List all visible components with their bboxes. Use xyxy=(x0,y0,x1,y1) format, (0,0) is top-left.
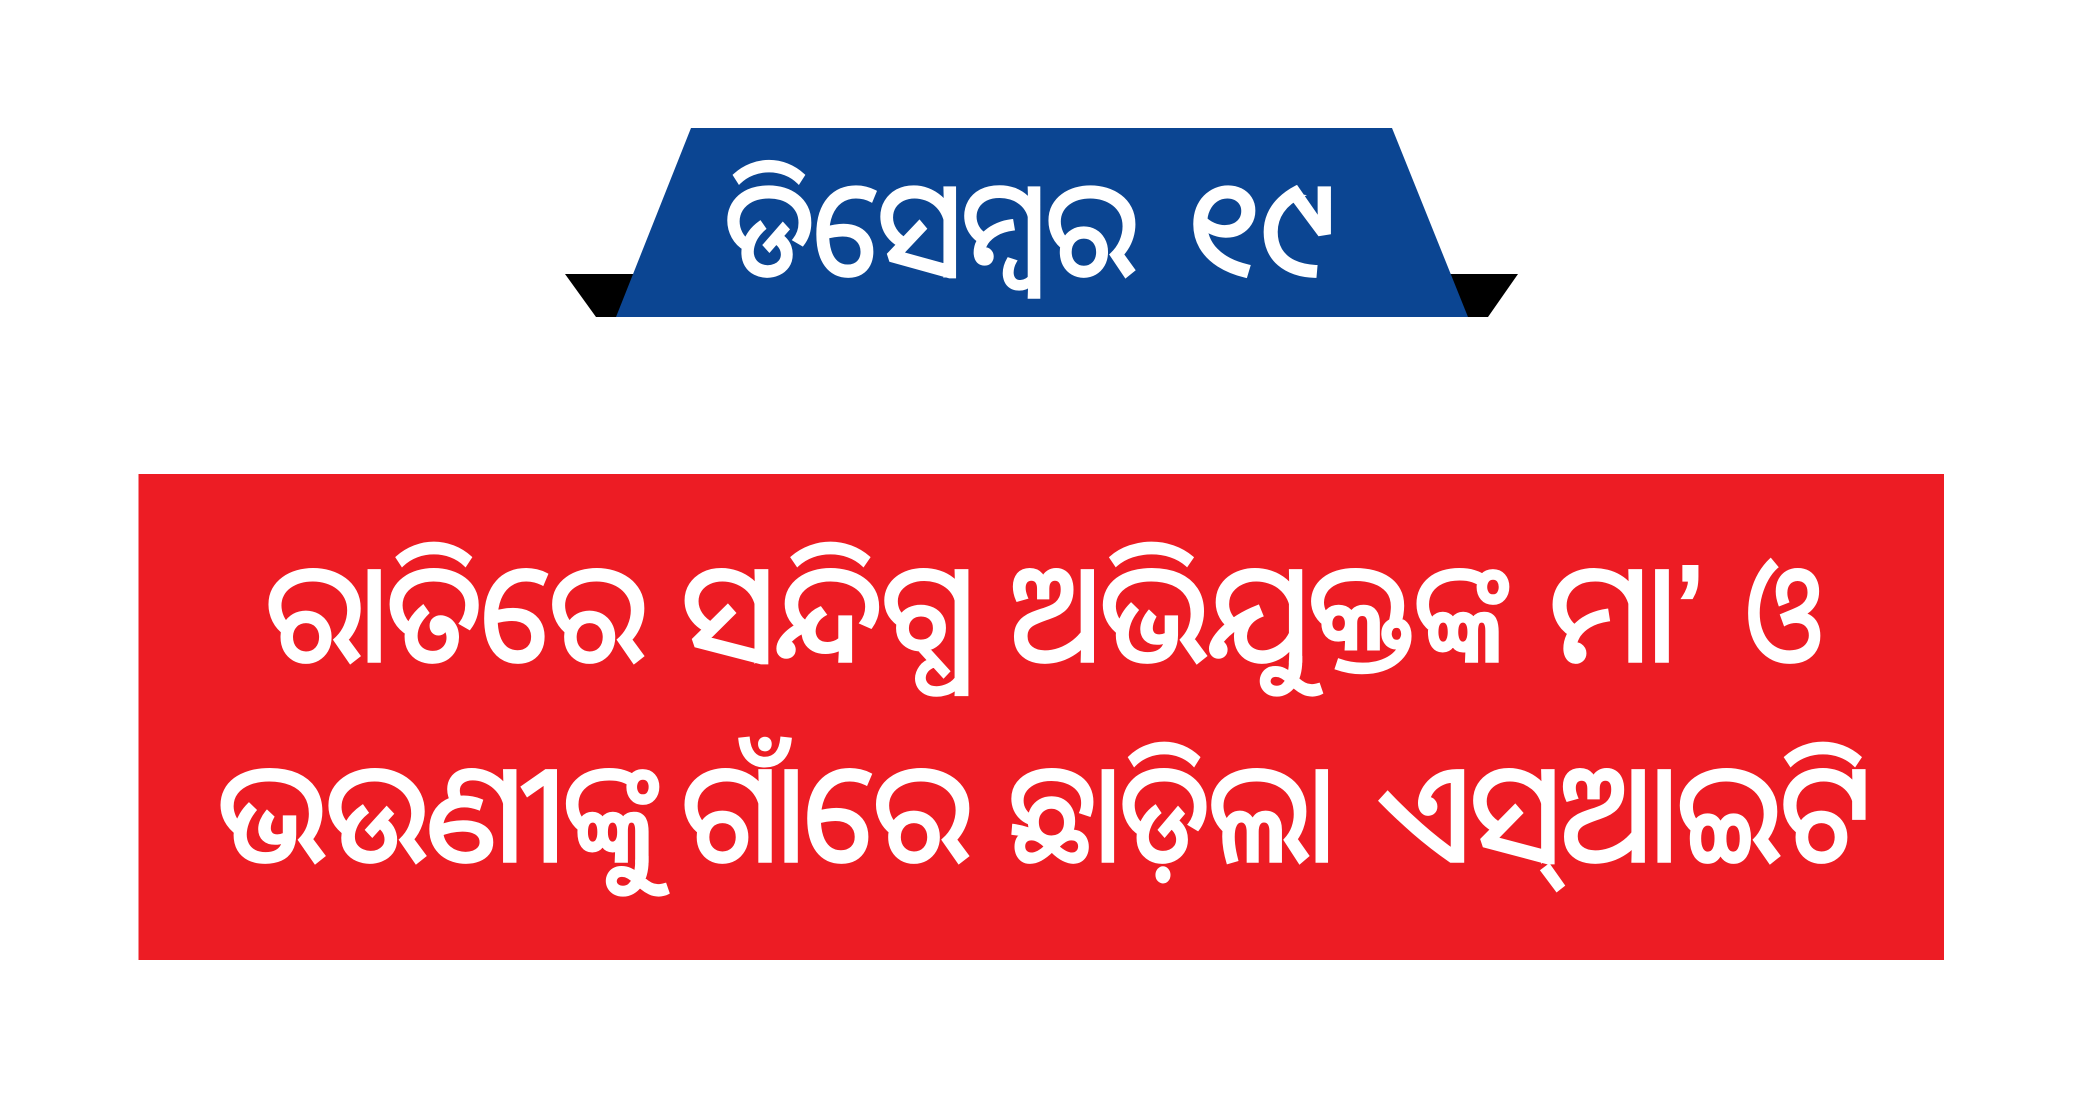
headline line 2: ଏସ୍‌ଆଇଟି xyxy=(1380,738,1872,891)
headline line 1: ଓ xyxy=(1746,538,1823,691)
headline line 1: ମା’ xyxy=(1550,538,1705,691)
headline line 2: ଗାଁରେ xyxy=(682,738,970,891)
banner blue trapezoid xyxy=(616,128,1468,317)
banner fold: right xyxy=(1440,274,1518,317)
headline line 1: ସନ୍ଦିଗ୍ଧ xyxy=(682,538,975,695)
banner fold: left xyxy=(565,274,640,317)
headline line 2: ଭଉଣୀଙ୍କୁ xyxy=(218,738,668,895)
date banner xyxy=(565,128,1518,317)
red panel background xyxy=(138,474,1944,960)
date heading: ଡିସେମ୍ବର xyxy=(725,156,1136,303)
headline line 1: ଅଭିଯୁକ୍ତଙ୍କ xyxy=(1011,538,1509,695)
headline line 2: ଛାଡ଼ିଲା xyxy=(1009,738,1334,891)
date heading: ୧୯ xyxy=(1186,156,1335,303)
headline line 1: ରାତିରେ xyxy=(266,538,645,691)
headline line 2 xyxy=(218,738,1872,895)
headline line 1 xyxy=(266,538,1823,695)
panel: red headline xyxy=(138,474,1944,960)
